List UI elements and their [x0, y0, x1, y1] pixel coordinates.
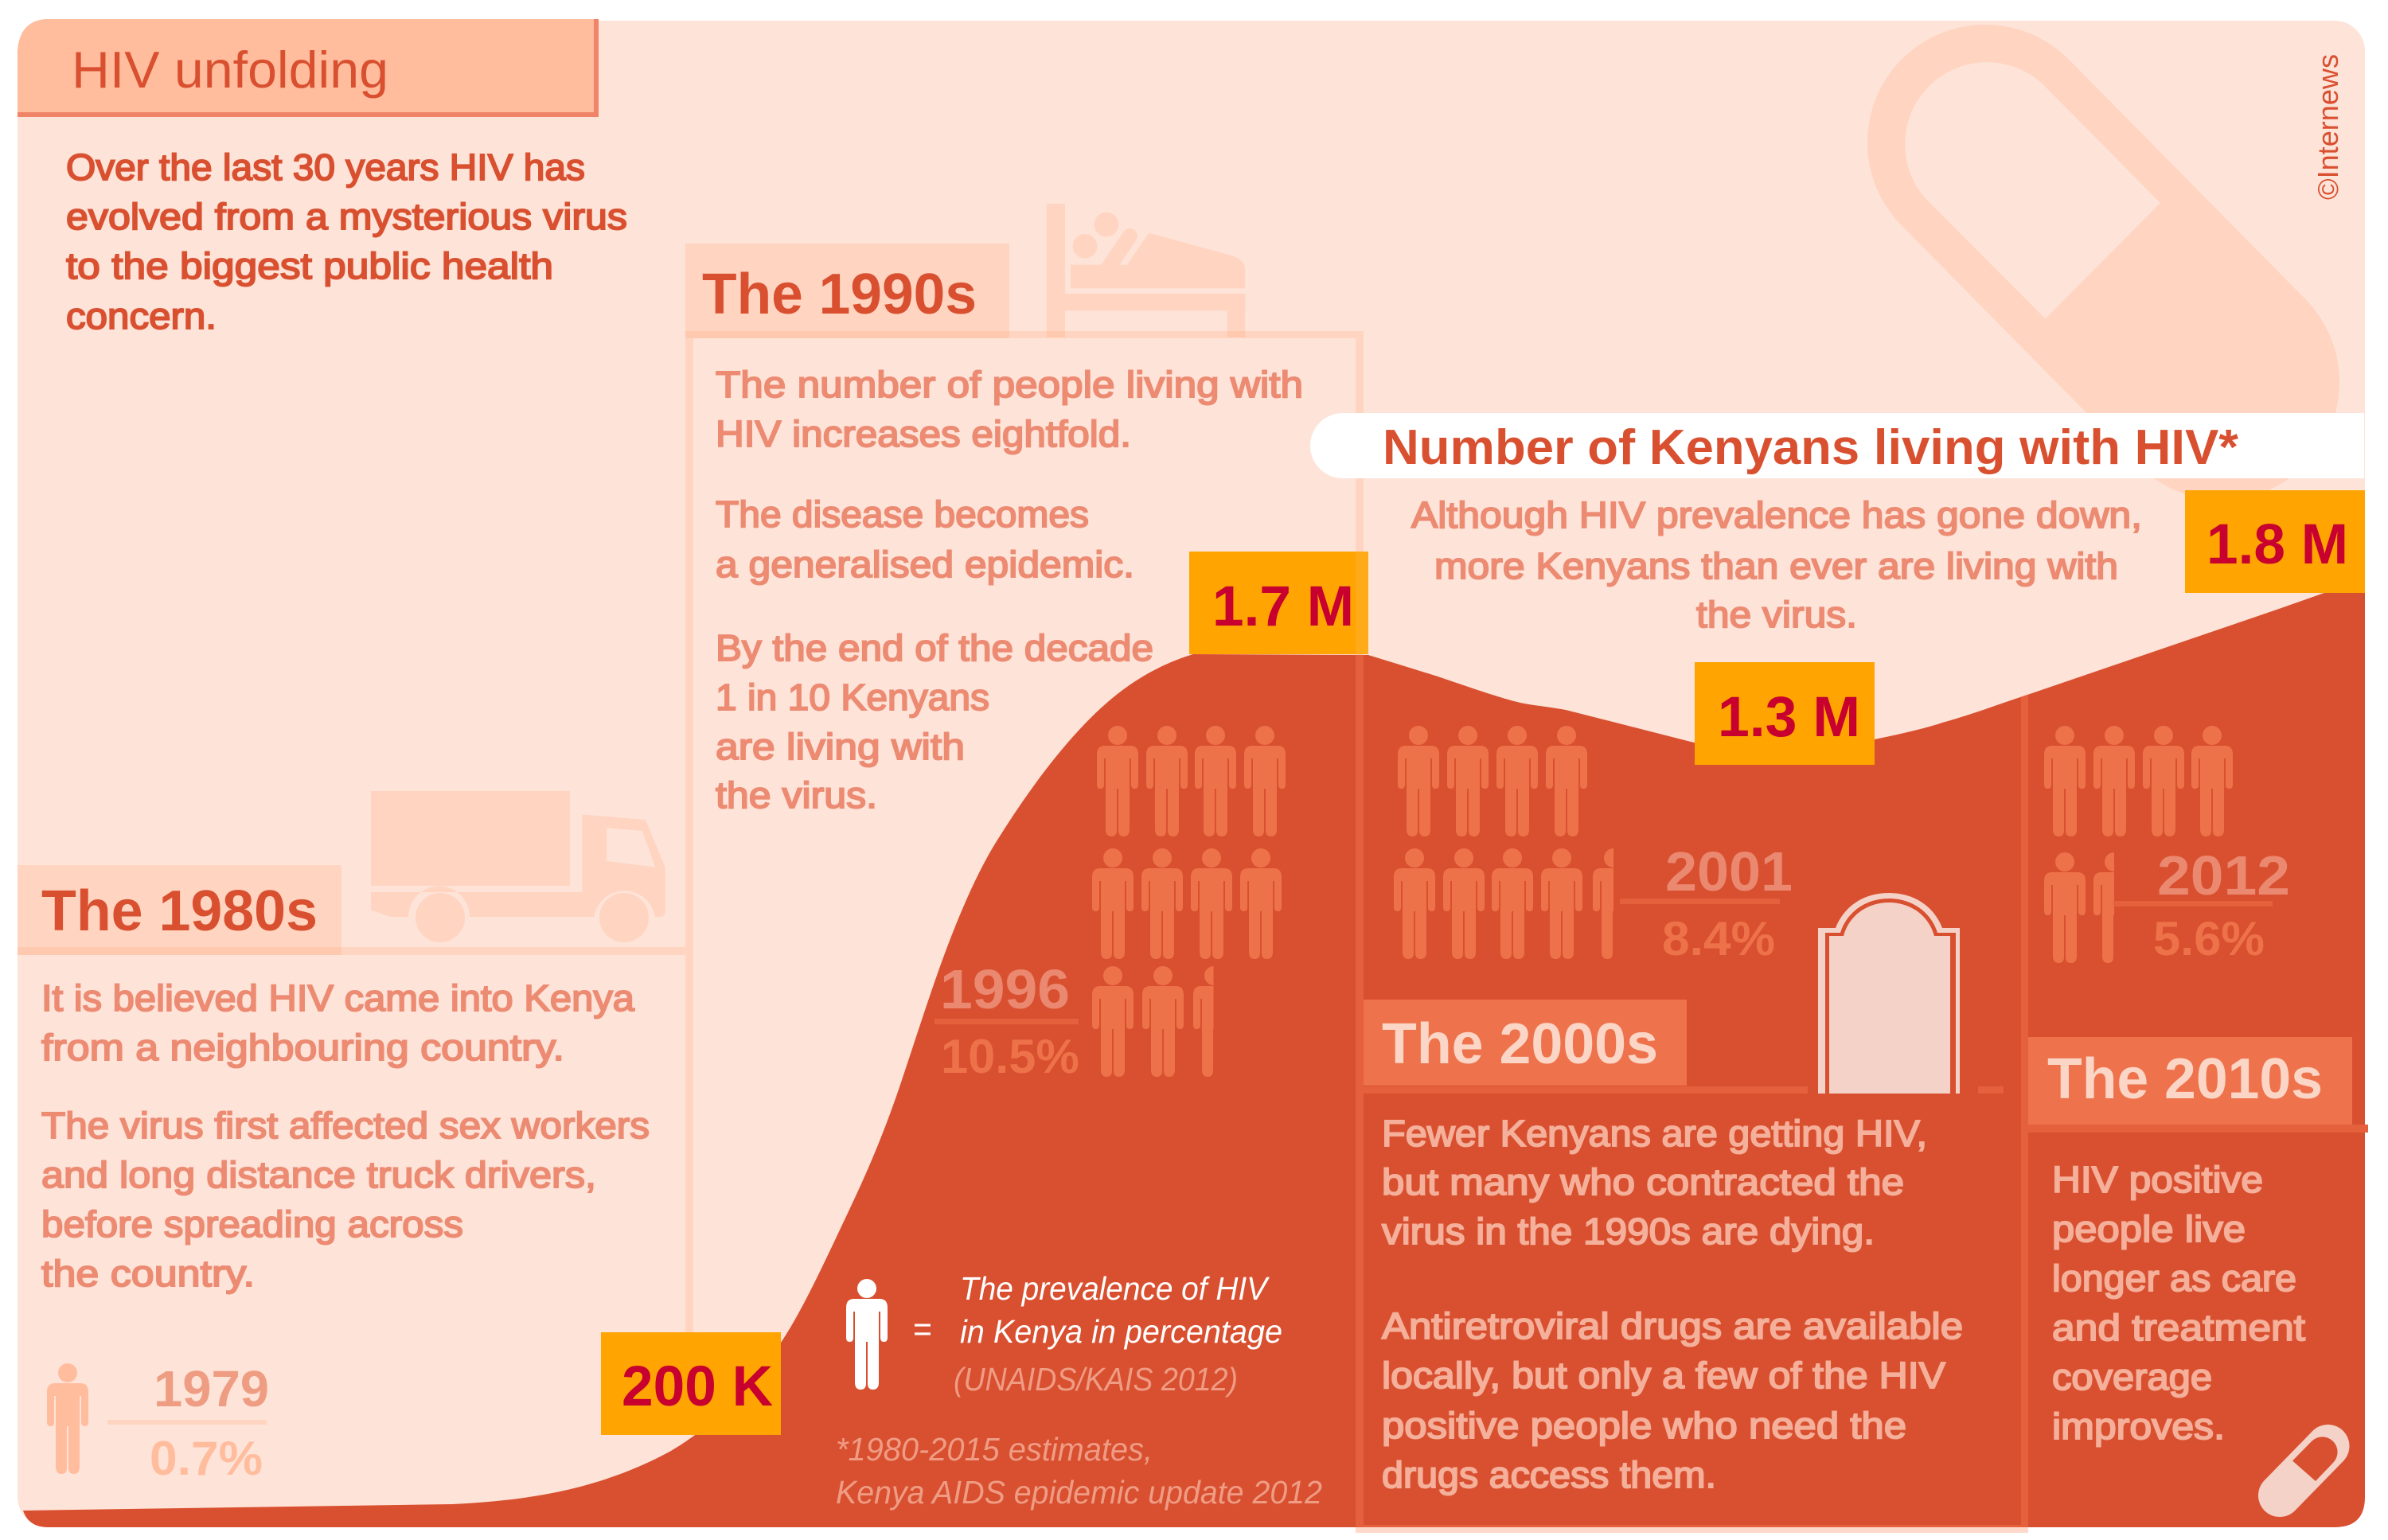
value box: 1.7 M: 1.7 M	[1212, 575, 1354, 638]
text: although prevalence: Although HIV prevalence has gone down,	[1411, 494, 2142, 536]
text: 1980s body: The virus first affected sex workers	[41, 1105, 650, 1146]
stat: 2001 prevalence: 8.4%	[1662, 912, 1775, 965]
legend: person equals prevalence: The prevalence of HIV	[960, 1270, 1270, 1307]
text: 2000s body: locally, but only a few of the HIV	[1382, 1355, 1945, 1396]
stat: 1979 prevalence: 1979	[154, 1360, 269, 1417]
text: 1980s body: before spreading across	[41, 1203, 463, 1245]
title tab: HIV unfolding	[72, 41, 388, 99]
title bar: Number of Kenyans living with HIV: Number of Kenyans living with HIV*	[1383, 420, 2239, 475]
stat: 2012 prevalence: 2012	[2157, 844, 2290, 906]
text: 1990s body: are living with	[716, 726, 965, 767]
text: 1990s body: the virus.	[716, 774, 877, 816]
text: although prevalence	[1411, 494, 2142, 635]
text: 1990s body	[716, 364, 1303, 816]
stat: 1996 prevalence	[935, 958, 1079, 1083]
bottom edge strip	[1356, 1525, 2028, 1533]
stat: 1979 prevalence: 0.7%	[150, 1432, 263, 1485]
icon: large pill	[1905, 62, 2222, 382]
footnote	[836, 1431, 1322, 1511]
text: 1980s body: and long distance truck drivers,	[41, 1154, 596, 1195]
value box: 200 K	[601, 1332, 781, 1435]
value box: 200 K: 200 K	[622, 1355, 773, 1418]
text: 1980s body: from a neighbouring country.	[41, 1027, 564, 1068]
icon: truck	[371, 791, 665, 942]
text: 2010s body: longer as care	[2052, 1257, 2296, 1299]
frame lines: 1980s and 1990s	[18, 331, 1364, 1334]
legend: person equals prevalence: in Kenya in percentage	[960, 1313, 1282, 1350]
value box: 1.8 M	[2185, 490, 2365, 593]
intro text: concern.	[66, 295, 217, 337]
text: 2010s body: and treatment	[2052, 1307, 2305, 1348]
text: 2000s body: but many who contracted the	[1382, 1161, 1904, 1203]
text: 1990s body: HIV increases eightfold.	[716, 413, 1131, 454]
stat: 2012 prevalence: 5.6%	[2153, 912, 2265, 965]
value box: 1.8 M: 1.8 M	[2207, 513, 2348, 576]
icon: headstone	[1818, 893, 1960, 1094]
text: 1980s body	[41, 977, 650, 1294]
title tab	[18, 19, 599, 117]
text: 2000s body	[1382, 1113, 1963, 1495]
text: 2000s body: drugs access them.	[1382, 1454, 1716, 1495]
chart: area curve of Kenyans living with HIV	[23, 579, 2365, 1527]
stat: 2001 prevalence	[1620, 840, 1793, 965]
panel: The 2000s heading	[1364, 1000, 2004, 1094]
panel: The 2010s heading: The 2010s	[2047, 1047, 2323, 1111]
text: 2000s body: Fewer Kenyans are getting HIV,	[1382, 1113, 1927, 1154]
footnote: Kenya AIDS epidemic update 2012	[836, 1474, 1322, 1511]
text: 2000s body: Antiretroviral drugs are available	[1382, 1305, 1963, 1347]
panel: The 1980s heading: The 1980s	[41, 879, 318, 943]
icon: hospital bed	[1047, 204, 1245, 337]
panel: The 1980s heading	[18, 865, 341, 955]
legend: person equals prevalence: =	[913, 1310, 932, 1349]
text: although prevalence: the virus.	[1696, 594, 1857, 635]
icon group: 1996 people	[1092, 726, 1286, 1077]
credit: ©Internews	[2312, 54, 2344, 200]
legend: person equals prevalence	[846, 1270, 1282, 1398]
legend: person equals prevalence: (UNAIDS/KAIS 2012)	[954, 1361, 1238, 1398]
footnote: *1980-2015 estimates,	[836, 1431, 1153, 1468]
text: 1980s body: It is believed HIV came into Kenya	[41, 977, 634, 1019]
text: 1980s body: the country.	[41, 1253, 255, 1294]
icon group: 2012 people	[2044, 726, 2233, 963]
panel: The 2000s heading: The 2000s	[1382, 1012, 1658, 1076]
value box: 1.3 M: 1.3 M	[1718, 686, 1860, 749]
value box: 1.3 M	[1695, 662, 1875, 765]
title bar: Number of Kenyans living with HIV	[1310, 413, 2364, 478]
text: 2010s body: HIV positive	[2052, 1159, 2263, 1200]
intro text	[66, 146, 627, 337]
stat: 1979 prevalence	[47, 1360, 269, 1485]
text: 2010s body: improves.	[2052, 1405, 2225, 1447]
panel: The 1990s heading	[685, 244, 1009, 338]
text: 1990s body: 1 in 10 Kenyans	[716, 676, 989, 718]
text: although prevalence: more Kenyans than ever are living with	[1434, 545, 2118, 587]
panel: The 1990s heading: The 1990s	[702, 263, 977, 326]
stat: 1996 prevalence: 1996	[940, 958, 1070, 1020]
text: 1990s body: The number of people living with	[716, 364, 1303, 405]
icon: small pill	[2280, 1437, 2338, 1495]
stat: 1996 prevalence: 10.5%	[941, 1030, 1079, 1083]
panel: The 2010s heading	[2028, 1037, 2368, 1133]
text: 2010s body: coverage	[2052, 1356, 2212, 1398]
stat: 2012 prevalence	[2113, 844, 2290, 965]
value box: 1.7 M	[1189, 552, 1368, 654]
text: 1990s body: The disease becomes	[716, 493, 1089, 535]
stat: 2001 prevalence: 2001	[1665, 840, 1793, 903]
text: 2000s body: virus in the 1990s are dying.	[1382, 1211, 1875, 1252]
intro text: Over the last 30 years HIV has	[66, 146, 585, 188]
frame lines on the dark area	[1356, 637, 2028, 1528]
text: 1990s body: a generalised epidemic.	[716, 544, 1134, 585]
text: 2010s body: people live	[2052, 1208, 2246, 1250]
icon group: 2001 people	[1394, 726, 1634, 959]
intro text: evolved from a mysterious virus	[66, 196, 627, 237]
text: 1990s body: By the end of the decade	[716, 627, 1153, 669]
text: 2010s body	[2052, 1159, 2305, 1447]
intro text: to the biggest public health	[66, 245, 553, 287]
text: 2000s body: positive people who need the	[1382, 1405, 1906, 1446]
